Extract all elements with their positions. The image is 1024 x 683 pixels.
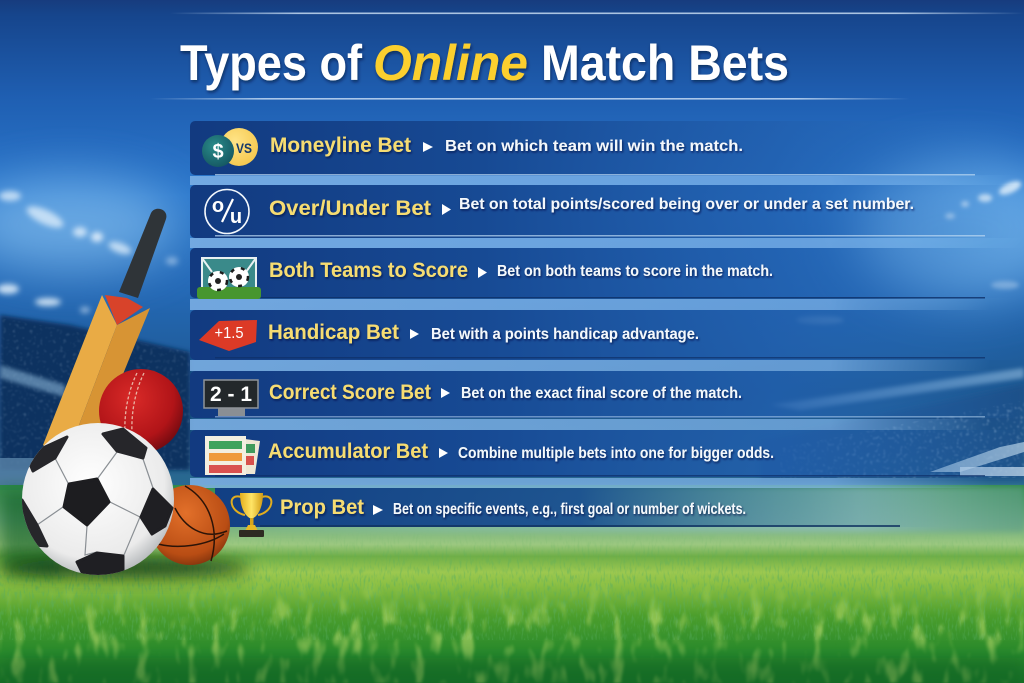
heading: Accumulator Bet bbox=[268, 440, 428, 463]
panel: Over/Under Bet bbox=[190, 185, 1024, 238]
icon: dollar versus coins bbox=[202, 128, 258, 167]
heading: Handicap Bet bbox=[268, 321, 399, 344]
arrow bbox=[441, 388, 450, 398]
icon: soccer ball bbox=[22, 423, 174, 578]
description: Bet on the exact final score of the match. bbox=[461, 385, 742, 402]
icon: over under circle: o bbox=[212, 195, 224, 217]
description: Bet on specific events, e.g., first goal or number of wickets. bbox=[393, 501, 746, 518]
icon: cricket bat bbox=[43, 209, 166, 462]
right stand bbox=[760, 385, 1024, 480]
left floodlights bbox=[0, 191, 178, 313]
title: Online bbox=[373, 35, 528, 91]
title: Match Bets bbox=[541, 35, 789, 91]
arrow bbox=[410, 329, 419, 339]
icon: red handicap tag: +1.5 bbox=[214, 325, 244, 342]
icon: over under circle bbox=[205, 190, 249, 234]
description: Bet with a points handicap advantage. bbox=[431, 326, 699, 343]
heading: Both Teams to Score bbox=[269, 259, 468, 282]
icon: basketball bbox=[150, 485, 230, 565]
arrow bbox=[442, 204, 451, 215]
heading: Moneyline Bet bbox=[270, 134, 411, 157]
heading: Over/Under Bet bbox=[269, 197, 431, 220]
title bbox=[180, 35, 789, 91]
icon: cricket ball bbox=[99, 369, 183, 453]
icon: red handicap tag bbox=[199, 320, 257, 351]
illustration: sports equipment bbox=[0, 209, 250, 578]
description: Bet on which team will win the match. bbox=[445, 138, 743, 155]
icon: gold trophy bbox=[232, 493, 271, 537]
icon: goal with two balls bbox=[197, 258, 261, 299]
heading: Prop Bet bbox=[280, 496, 364, 519]
panel: Handicap Bet bbox=[190, 310, 1024, 360]
arrow bbox=[439, 448, 448, 458]
title: Types of bbox=[180, 35, 362, 91]
title band bbox=[150, 12, 1024, 100]
arrow bbox=[373, 505, 383, 515]
arrow bbox=[423, 142, 433, 152]
panel: Both Teams to Score bbox=[190, 248, 1024, 299]
panel: gap strips bbox=[190, 176, 990, 488]
icon: scoreboard bbox=[204, 380, 258, 416]
icon: dollar versus coins: $ bbox=[212, 141, 224, 163]
panel: Moneyline Bet bbox=[190, 121, 1024, 176]
description: Bet on total points/scored being over or under a set number. bbox=[459, 196, 914, 213]
description: Combine multiple bets into one for bigger odds. bbox=[458, 445, 774, 462]
arrow bbox=[478, 267, 487, 278]
left stand bbox=[0, 315, 190, 470]
stadium background bbox=[0, 0, 1024, 490]
description: Bet on both teams to score in the match. bbox=[497, 263, 773, 280]
heading: Correct Score Bet bbox=[269, 381, 431, 404]
grass field bbox=[0, 485, 1024, 683]
panel: Accumulator Bet bbox=[190, 430, 1024, 477]
icon: over under circle: u bbox=[230, 206, 242, 228]
panel: Prop Bet bbox=[215, 488, 945, 537]
icon: dollar versus coins: VS bbox=[236, 140, 252, 156]
panel: Correct Score Bet bbox=[190, 371, 1024, 418]
ground shadow bbox=[0, 558, 250, 578]
icon: bet slips bbox=[205, 436, 260, 475]
icon: scoreboard: 2 - 1 bbox=[210, 383, 252, 406]
